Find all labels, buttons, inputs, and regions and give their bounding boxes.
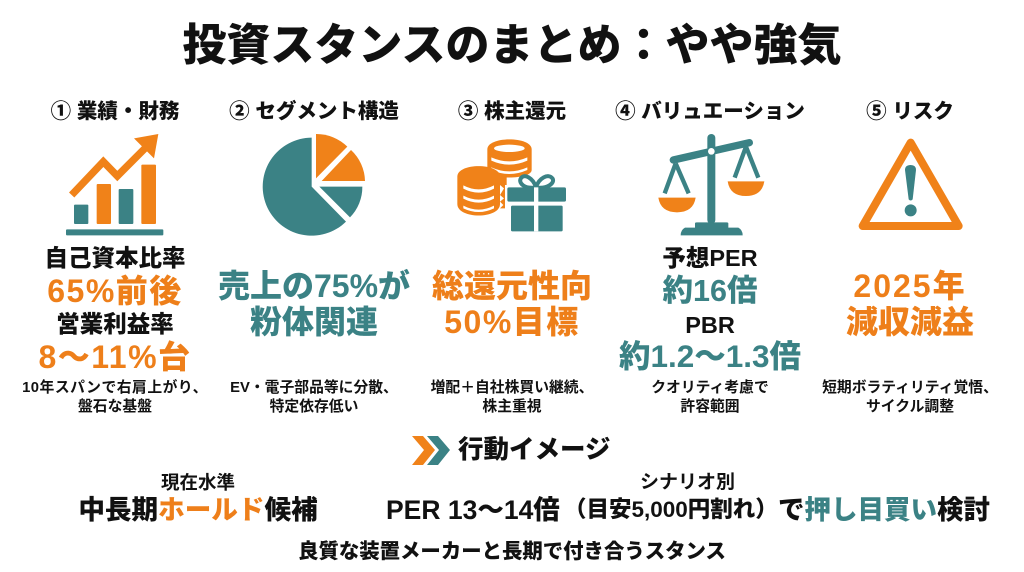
note line 2: 特定依存低い	[270, 399, 358, 415]
statement: hold: 中長期ホールド候補	[78, 495, 318, 525]
heading: 株主還元: ③ 株主還元	[458, 100, 566, 123]
note: 10年スパンで右肩上がり、	[22, 380, 208, 396]
icon: pie chart	[262, 134, 365, 236]
metric: 自己資本比率: 自己資本比率	[44, 245, 186, 271]
statement: buy on dips: で押し目買い検討	[778, 495, 990, 525]
metric value: 65%前後: 65%前後	[47, 273, 183, 309]
icon: warning triangle	[858, 138, 963, 230]
icon: balance scale	[658, 134, 764, 236]
panel: バリュエーション	[615, 100, 805, 415]
heading: 業績・財務: ① 業績・財務	[51, 100, 179, 123]
panel: 株主還元	[431, 100, 593, 415]
panel: セグメント構造	[218, 100, 410, 415]
statement: buy on dips	[386, 495, 990, 525]
icon: rising bar chart	[66, 134, 164, 236]
closing statement: 良質な装置メーカーと長期で付き合うスタンス	[298, 541, 726, 563]
icon: coins and gift	[457, 139, 566, 232]
note line 2: サイクル調整	[866, 399, 954, 415]
note line 2: 許容範囲	[680, 399, 740, 415]
metric: 予想PER: 予想PER	[662, 245, 758, 271]
note line 2: 盤石な基盤	[78, 399, 152, 415]
action: scenario	[386, 472, 990, 525]
label: シナリオ別: シナリオ別	[640, 472, 735, 493]
note: 短期ボラティリティ覚悟、	[822, 380, 998, 396]
panel: リスク	[822, 100, 998, 415]
back coin stack	[487, 139, 532, 178]
front coin stack	[457, 166, 500, 216]
note line 2: 株主重視	[482, 399, 542, 415]
heading: セグメント構造: ② セグメント構造	[229, 100, 399, 123]
metric: PBR: PBR	[685, 312, 735, 338]
metric value: 約16倍: 約16倍	[663, 274, 757, 308]
gift	[505, 185, 568, 234]
title: 投資スタンスのまとめ：やや強気	[182, 21, 842, 70]
heading: リスク: ⑤ リスク	[866, 100, 954, 123]
metric: 営業利益率: 営業利益率	[56, 311, 174, 337]
note: クオリティ考慮で	[651, 380, 769, 396]
highlight: 総還元性向: 総還元性向	[432, 268, 592, 304]
highlight: 減収減益: 減収減益	[846, 304, 974, 340]
metric value: 約1.2〜1.3倍: 約1.2〜1.3倍	[619, 338, 801, 374]
statement: buy on dips: PER 13〜14倍	[386, 495, 560, 525]
label: 現在水準: 現在水準	[161, 472, 235, 493]
icon: double chevron	[412, 436, 450, 465]
highlight: 2025年: 2025年	[853, 268, 967, 304]
statement: buy on dips: （目安5,000円割れ）	[564, 497, 778, 522]
action: current level	[78, 472, 318, 525]
panel: 業績・財務	[22, 100, 208, 415]
highlight: 50%目標: 50%目標	[444, 304, 580, 340]
metric value: 8〜11%台: 8〜11%台	[38, 339, 192, 375]
highlight: 粉体関連: 粉体関連	[250, 304, 378, 340]
heading: バリュエーション: ④ バリュエーション	[615, 100, 805, 123]
note: EV・電子部品等に分散、	[230, 380, 398, 396]
heading: 行動イメージ: 行動イメージ	[458, 436, 610, 464]
highlight: 売上の75%が: 売上の75%が	[218, 268, 410, 304]
note: 増配＋自社株買い継続、	[431, 380, 593, 396]
